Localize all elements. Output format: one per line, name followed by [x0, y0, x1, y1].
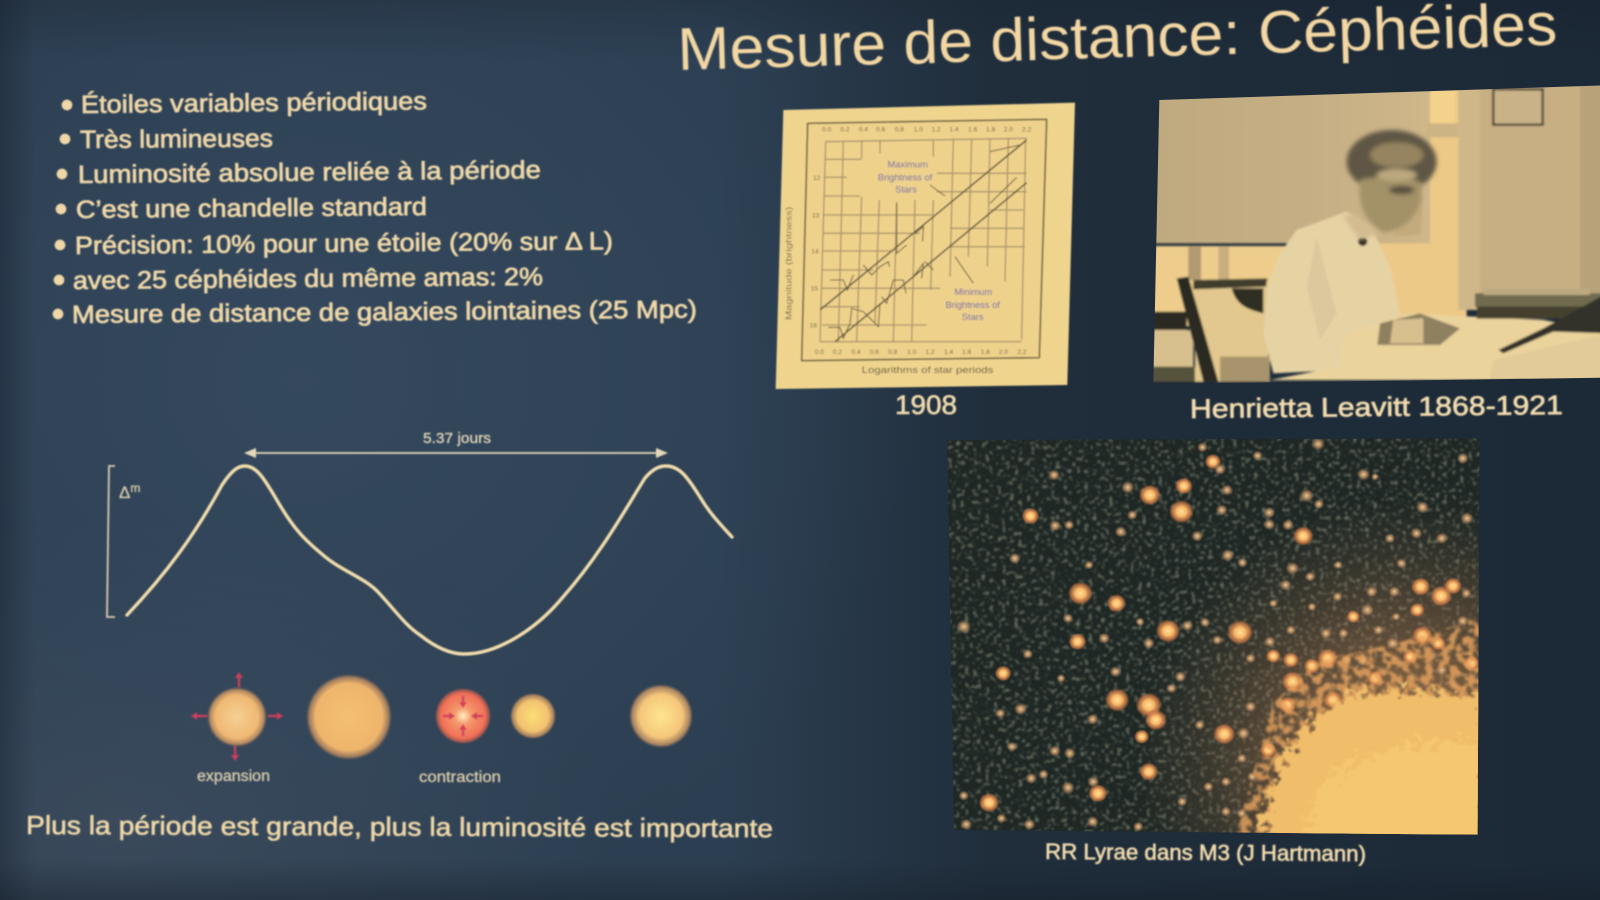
- chart label: maximum: Stars: [895, 185, 917, 195]
- star: contraction: [435, 688, 491, 744]
- chart label: maximum: Maximum: [887, 159, 928, 169]
- chart top axis labels: 0.2: [840, 127, 850, 134]
- chart bottom axis labels: 1.4: [944, 349, 954, 356]
- bullet 5: Précision: 10% pour une étoile (20% sur Δ L): [75, 227, 613, 260]
- amplitude label: m: [130, 481, 140, 495]
- chart bottom axis labels: 1.0: [907, 349, 917, 356]
- contraction arrows: [443, 696, 483, 736]
- caption: RR Lyrae: RR Lyrae dans M3 (J Hartmann): [1045, 839, 1366, 866]
- period label: 5.37 jours: [423, 430, 491, 447]
- amplitude label: Δ: [119, 483, 130, 502]
- photo table and papers: [1270, 313, 1600, 380]
- chart top axis labels: 1.4: [949, 127, 959, 134]
- chart bottom axis labels: 0.6: [870, 349, 879, 356]
- chart paper: [776, 103, 1075, 389]
- amplitude bracket: [107, 466, 115, 617]
- star: return: [629, 684, 693, 748]
- photo picture frame: [1493, 89, 1543, 125]
- faint speckled stars: [940, 430, 1487, 840]
- chart grid: [820, 138, 1026, 342]
- bullet 1: Étoiles variables périodiques: [81, 86, 427, 119]
- chart left axis labels: 15: [811, 286, 818, 293]
- caption: 1908: 1908: [895, 390, 957, 420]
- photo wall right: [1478, 86, 1582, 295]
- chart bottom axis labels: 0.2: [833, 349, 842, 356]
- label: expansion: expansion: [197, 768, 270, 785]
- chart top axis labels: 0.8: [895, 127, 904, 134]
- bullet 6: avec 25 céphéides du même amas: 2%: [73, 263, 543, 295]
- chart label: maximum: Brightness of: [878, 173, 933, 183]
- label: contraction: contraction: [419, 769, 501, 786]
- star: expansion: [191, 672, 283, 761]
- chart bottom axis labels: 0.8: [888, 349, 898, 356]
- chart bottom axis labels: 2.2: [1017, 349, 1027, 356]
- period arrow: [244, 448, 668, 458]
- bullet 7: Mesure de distance de galaxies lointaines (25 Mpc): [72, 296, 697, 329]
- chart left axis labels: 14: [811, 248, 819, 255]
- chart top axis labels: 1.2: [931, 127, 941, 134]
- cluster core: [1256, 690, 1487, 850]
- chart bottom axis labels: 2.0: [999, 349, 1008, 356]
- conclusion text: Plus la période est grande, plus la luminosité est importante: [26, 810, 773, 843]
- chart label: minimum: Minimum: [954, 287, 992, 297]
- photo woman's head: [1343, 130, 1437, 240]
- chart left axis labels: 12: [813, 175, 821, 182]
- chart left axis labels: 13: [812, 212, 820, 219]
- dim stars: [956, 437, 1474, 832]
- photo: Henrietta Leavitt: [1150, 83, 1600, 388]
- bullet 4: C’est une chandelle standard: [76, 193, 427, 224]
- bullet list: [53, 86, 697, 329]
- star field background: [940, 430, 1487, 840]
- photo dark lower edge of table: [1154, 380, 1411, 384]
- chart x axis title: Logarithms of star periods: [862, 365, 994, 375]
- chart bottom axis labels: 1.2: [925, 349, 935, 356]
- photo woman's body: [1263, 212, 1400, 373]
- chart top axis labels: 0.0: [822, 127, 832, 134]
- chart top axis labels: 2.2: [1022, 127, 1032, 134]
- panel: 1908 period-luminosity chart: [776, 103, 1075, 389]
- chart bottom axis labels: 1.6: [962, 349, 972, 356]
- photo books and typewriter: [1475, 293, 1600, 307]
- chart trend lines: [820, 140, 1027, 342]
- cluster core halo, mottled: [1235, 617, 1487, 840]
- expansion arrows: [191, 672, 283, 761]
- photo background paper behind head: [1396, 204, 1422, 236]
- caption: Henrietta Leavitt: Henrietta Leavitt 1868-1921: [1190, 390, 1563, 424]
- bullet 2: Très lumineuses: [80, 125, 273, 154]
- chart top axis labels: 1.6: [968, 127, 978, 134]
- star: minimum size: [510, 693, 556, 739]
- chart data traces: [828, 145, 1020, 338]
- chart top axis labels: 2.0: [1004, 127, 1013, 134]
- photo pillar: [1458, 83, 1480, 310]
- bullet 3: Luminosité absolue reliée à la période: [78, 156, 541, 189]
- chart y axis title: Magnitude (brightness): [784, 206, 794, 320]
- chart top axis labels: 1.8: [986, 127, 996, 134]
- photo chair: [1195, 285, 1268, 382]
- panel: light curve and pulsating stars: [107, 430, 732, 786]
- photo lower window band: [1150, 246, 1290, 326]
- star: maximum size: [306, 674, 392, 760]
- chart bottom axis labels: 0.0: [815, 349, 824, 356]
- bright stars: [979, 454, 1480, 813]
- chart pointers: [930, 185, 973, 283]
- chart bottom axis labels: 1.8: [981, 349, 990, 356]
- warm cluster haze: [1160, 522, 1479, 834]
- chart top axis labels: 0.6: [876, 127, 886, 134]
- photo window: [1378, 90, 1468, 318]
- chart top axis labels: 0.4: [859, 127, 868, 134]
- light curve: [127, 466, 732, 654]
- chart top axis labels: 1.0: [914, 127, 923, 134]
- photo wall left: [1150, 83, 1430, 243]
- chart label: minimum: Brightness of: [945, 300, 1000, 310]
- chart bottom axis labels: 0.4: [851, 349, 861, 356]
- photo: RR Lyrae star field in M3: [940, 430, 1487, 850]
- chart left axis labels: 16: [810, 323, 817, 330]
- chart label: minimum: Stars: [962, 312, 984, 322]
